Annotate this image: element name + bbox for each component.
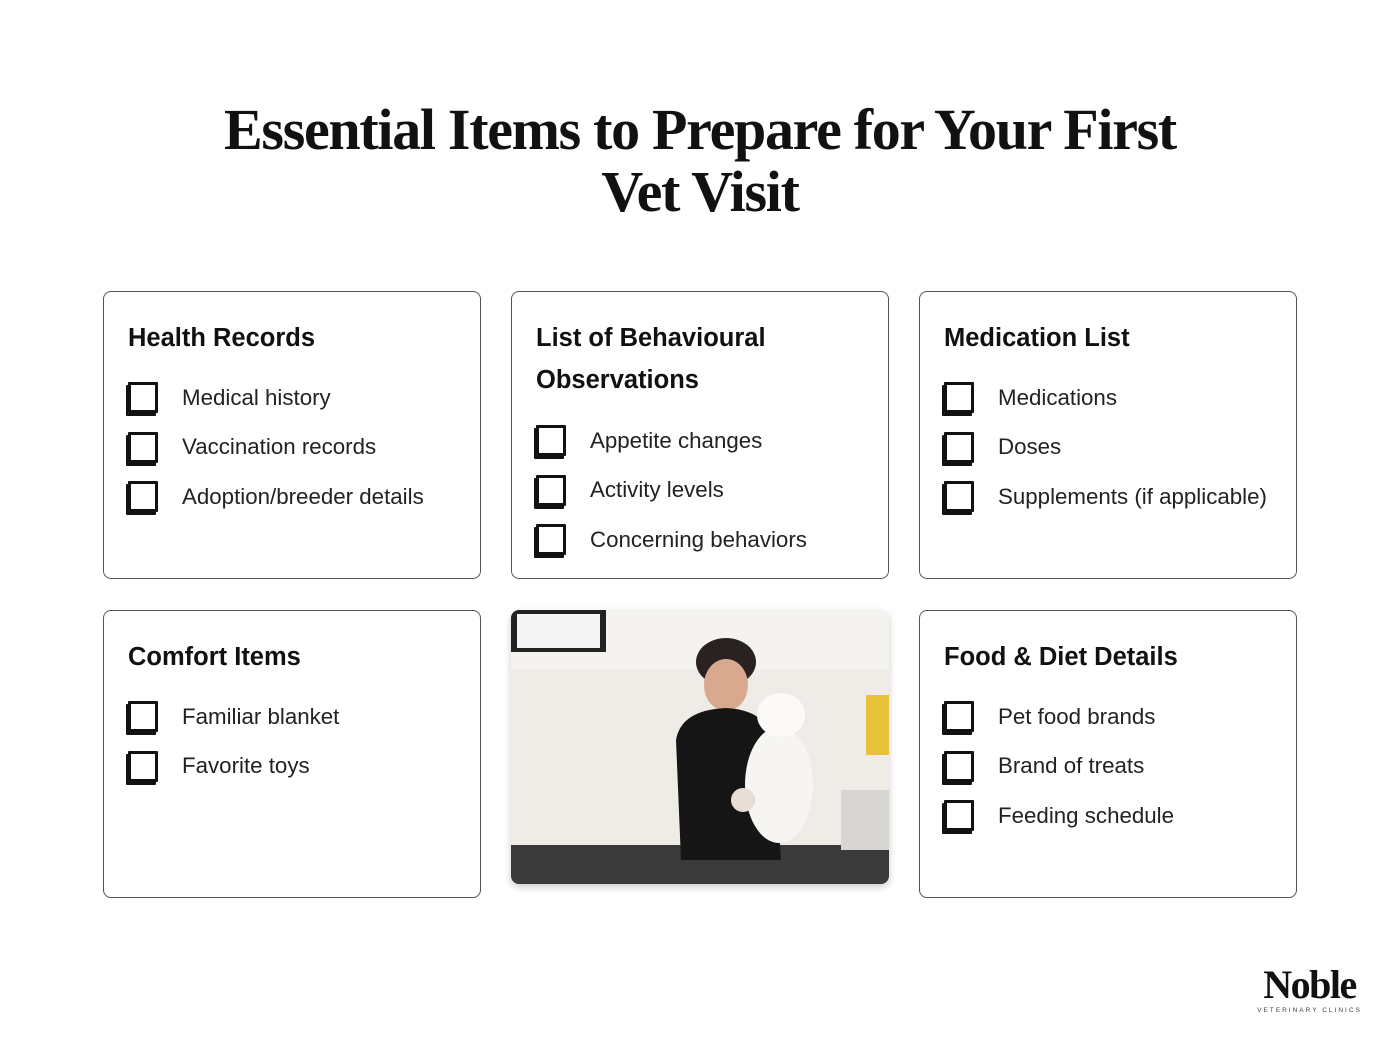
checklist [534, 425, 807, 558]
checklist: Supplements (if applicable) [998, 484, 1267, 509]
checklist [126, 701, 340, 785]
panel: behavioural observations [511, 291, 889, 579]
title: Essential Items to Prepare for Your First [224, 97, 1176, 162]
logo: VETERINARY CLINICS [1257, 1007, 1362, 1014]
checklist [942, 382, 1267, 515]
checklist [942, 701, 1174, 834]
checklist: Pet food brands [998, 704, 1155, 729]
checklist: Appetite changes [590, 428, 762, 453]
checklist: Familiar blanket [182, 704, 339, 729]
checklist: Medical history [182, 385, 331, 410]
checklist [126, 382, 424, 515]
photo: vet with dog [511, 610, 889, 884]
checklist: Feeding schedule [998, 803, 1174, 828]
checklist: Medications [998, 385, 1117, 410]
logo: Noble [1263, 962, 1356, 1007]
panel: comfort items [103, 610, 481, 898]
heading: Medication List [944, 324, 1130, 352]
checklist: Favorite toys [182, 753, 310, 778]
checklist: Doses [998, 434, 1061, 459]
checklist: Vaccination records [182, 434, 376, 459]
checklist: Activity levels [590, 477, 724, 502]
heading: List of Behavioural Observations [536, 324, 766, 394]
panel: food & diet [919, 610, 1297, 898]
checklist: Concerning behaviors [590, 527, 807, 552]
title: Vet Visit [601, 159, 799, 224]
heading: Food & Diet Details [944, 643, 1178, 671]
panel: health records [103, 291, 481, 579]
checklist: Adoption/breeder details [182, 484, 424, 509]
panel: medication list [919, 291, 1297, 579]
checklist: Brand of treats [998, 753, 1144, 778]
title [224, 97, 1177, 224]
heading: Comfort Items [128, 643, 301, 671]
heading: Health Records [128, 324, 315, 352]
